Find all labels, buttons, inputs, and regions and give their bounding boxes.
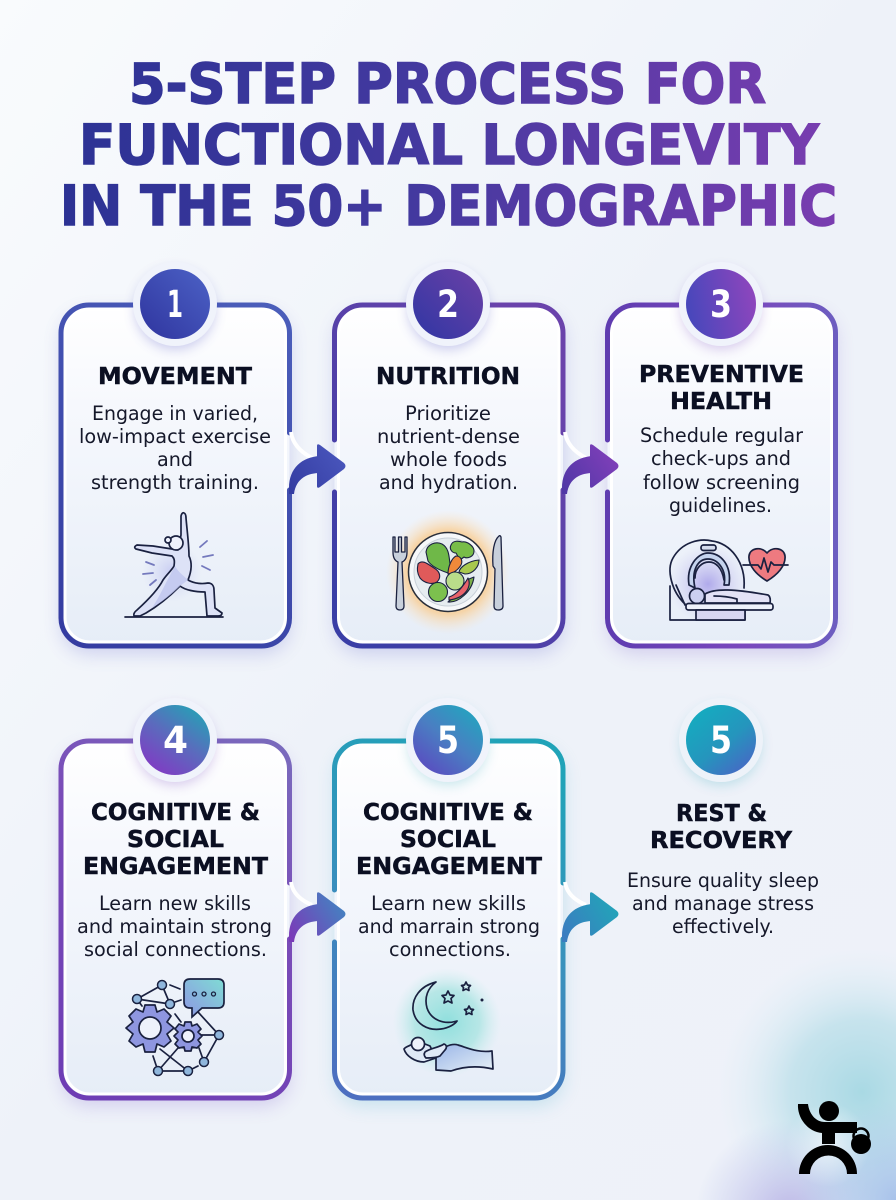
number badge 4: 4	[163, 719, 188, 762]
body text: nutrition: whole foods	[390, 448, 507, 471]
body text: preventive health: check-ups and	[651, 447, 791, 470]
logo: figure lifting kettlebell	[786, 1101, 871, 1187]
heading: preventive health: PREVENTIVE	[639, 360, 804, 388]
heading: rest and recovery: REST &	[676, 799, 767, 827]
icon: gears, network and speech bubble	[126, 979, 224, 1076]
heading: cognitive and social engagement: ENGAGEMENT	[83, 852, 268, 880]
heading: cognitive and social engagement: SOCIAL	[127, 825, 224, 853]
title: IN THE 50+ DEMOGRAPHIC	[60, 174, 837, 238]
body text: nutrition: and hydration.	[379, 471, 518, 494]
heading: cognitive and social engagement	[356, 798, 542, 880]
panel: rest and recovery	[627, 698, 819, 938]
heading: preventive health: HEALTH	[670, 387, 772, 415]
body text: rest and recovery: and manage stress	[632, 892, 814, 915]
number badge 3: 3	[710, 283, 732, 326]
icon: salad plate with fork and knife	[386, 510, 510, 634]
body text: preventive health: Schedule regular	[640, 424, 804, 447]
body text: learn new skills: and marrain strong	[358, 915, 540, 938]
panel: step 3 preventive health	[608, 262, 836, 654]
panel: step 4 cognitive and social engagement	[61, 698, 290, 1106]
heading: cognitive and social engagement: ENGAGEMENT	[356, 852, 542, 880]
number badge 1	[133, 262, 217, 349]
heading: cognitive and social engagement: COGNITIVE &	[91, 798, 260, 826]
title: 5-STEP PROCESS FOR	[129, 52, 766, 116]
number badge 3	[679, 262, 763, 349]
arrow: step 5 to rest	[562, 882, 618, 942]
body text: movement: strength training.	[91, 471, 259, 494]
heading: rest and recovery	[650, 799, 793, 854]
body text: movement: Engage in varied,	[92, 402, 258, 425]
heading: cognitive and social engagement: COGNITIVE &	[363, 798, 533, 826]
body text: learn new skills: connections.	[389, 938, 511, 961]
title: FUNCTIONAL LONGEVITY	[79, 113, 820, 177]
title	[60, 52, 837, 238]
body text: movement: and	[157, 448, 193, 471]
body text: preventive health: follow screening	[643, 471, 800, 494]
heading: cognitive and social engagement	[83, 798, 268, 880]
heading: rest and recovery: RECOVERY	[650, 826, 793, 854]
arrow: step 1 to 2	[289, 432, 346, 494]
icon: yoga warrior pose	[125, 513, 223, 617]
body text: cognitive and social engagement: Learn new skills	[99, 892, 251, 915]
number badge 5	[406, 698, 490, 785]
body text: rest and recovery: Ensure quality sleep	[627, 869, 819, 892]
body text: rest and recovery: effectively.	[672, 915, 774, 938]
arrow: step 2 to 3	[562, 432, 618, 494]
heading: movement: MOVEMENT	[98, 362, 252, 390]
number badge 2	[406, 262, 490, 349]
number badge 5: 5	[437, 719, 459, 762]
body text: nutrition	[377, 402, 520, 494]
body text: nutrition: nutrient-dense	[377, 425, 520, 448]
arrow: step 4 to 5	[289, 882, 346, 942]
body text: learn new skills: Learn new skills	[371, 892, 526, 915]
panel: step 1 movement	[61, 262, 290, 654]
number badge rest	[679, 698, 763, 785]
heading: cognitive and social engagement: SOCIAL	[400, 825, 496, 853]
panel: step 5 cognitive and social engagement	[334, 698, 564, 1106]
body text: rest and recovery	[627, 869, 819, 938]
body text: nutrition: Prioritize	[405, 402, 491, 425]
body text: movement	[79, 402, 271, 494]
number badge 1: 1	[167, 283, 183, 326]
heading: preventive health	[639, 360, 804, 415]
icon: MRI scanner with heart	[668, 540, 788, 624]
number badge 4	[133, 698, 217, 785]
body text: cognitive and social engagement	[77, 892, 272, 961]
body text: preventive health: guidelines.	[669, 494, 772, 517]
body text: preventive health	[640, 424, 804, 517]
body text: cognitive and social engagement: social connections.	[84, 938, 267, 961]
body text: cognitive and social engagement: and maintain strong	[77, 915, 272, 938]
panel: step 2 nutrition	[334, 262, 564, 654]
number badge rest: 5	[710, 719, 732, 762]
heading: nutrition: NUTRITION	[376, 362, 520, 390]
icon: moon, stars and sleeping person	[393, 968, 501, 1076]
body text: learn new skills	[358, 892, 540, 961]
body text: movement: low-impact exercise	[79, 425, 271, 448]
number badge 2: 2	[437, 283, 459, 326]
